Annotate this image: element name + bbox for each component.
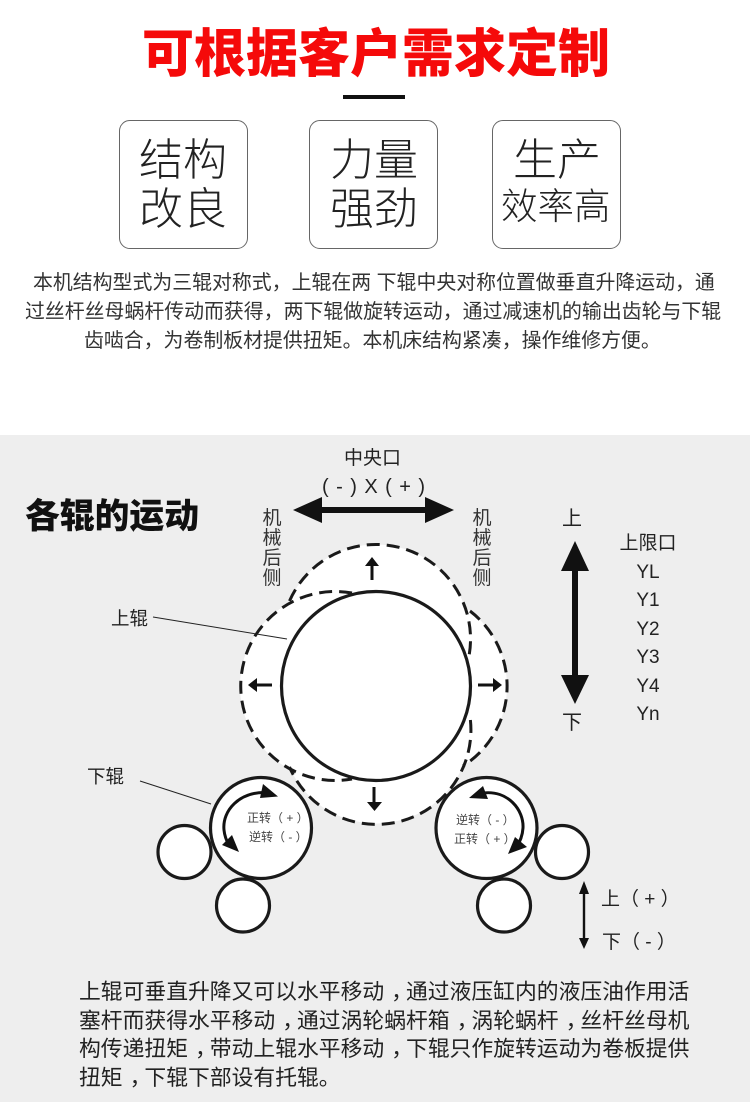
bottom paragraph: 构传递扭矩 ，带动上辊水平移动 ，下辊只作旋转运动为卷板提供 <box>79 1036 689 1061</box>
upper limit list: Y4 <box>636 676 660 697</box>
center opening label: 中央口 <box>344 447 401 469</box>
feature box: strength: 力量 <box>330 136 418 185</box>
upper limit list: Y3 <box>636 647 660 668</box>
intro paragraph: 齿啮合，为卷制板材提供扭矩。本机床结构紧凑，操作维修方便。 <box>84 330 661 352</box>
roller diagram <box>87 447 680 953</box>
upper limit list: Yn <box>636 704 660 725</box>
bottom paragraph <box>79 979 689 1090</box>
rotation labels left: 逆转（ - ） <box>249 829 308 844</box>
small arrow labels: 下（ - ） <box>602 931 676 953</box>
upper limit list: YL <box>636 562 660 583</box>
intro paragraph <box>25 272 721 352</box>
rotation arrow left <box>222 784 278 852</box>
panel heading: 各辊的运动 <box>25 497 199 536</box>
title: 可根据客户需求定制 <box>142 26 610 84</box>
center opening label <box>322 447 425 498</box>
upper roller label: 上辊 <box>111 608 148 629</box>
dashed roller positions <box>241 544 507 824</box>
upper roller <box>282 592 470 780</box>
rear side label right: 后 <box>472 547 492 569</box>
white motion envelope <box>240 544 507 824</box>
lower roller label: 下辊 <box>87 766 124 787</box>
rear side label left: 机 <box>262 507 282 529</box>
leader lines <box>140 617 287 804</box>
upper limit list <box>619 532 677 725</box>
feature box: structure <box>119 120 248 249</box>
rear side label right: 侧 <box>472 567 492 589</box>
feature box: strength <box>309 120 438 249</box>
rear side label left: 侧 <box>262 567 282 589</box>
bottom paragraph: 上辊可垂直升降又可以水平移动 ，通过液压缸内的液压油作用活 <box>79 979 689 1004</box>
feature box: efficiency: 生产 <box>513 136 601 185</box>
center opening label: ( - ) X ( + ) <box>322 476 425 498</box>
bottom paragraph: 扭矩 ，下辊下部设有托辊。 <box>79 1064 341 1090</box>
rear side label right: 机 <box>472 507 492 529</box>
rotation labels right <box>454 812 516 846</box>
feature box: structure: 改良 <box>139 185 227 234</box>
rear side label left <box>262 507 282 589</box>
motion arrows <box>248 557 502 811</box>
rotation labels right: 正转（ + ） <box>454 831 516 846</box>
vertical arrow labels: 下 <box>562 712 582 734</box>
title underline <box>343 95 405 99</box>
feature box: efficiency: 效率高 <box>501 186 610 227</box>
rotation labels left: 正转（ + ） <box>247 810 309 825</box>
vertical arrow labels <box>562 507 582 734</box>
upper limit list: Y1 <box>636 590 660 611</box>
lower roller left group <box>158 778 312 932</box>
feature box: strength: 强劲 <box>330 185 418 234</box>
vertical arrow large <box>561 541 589 704</box>
small arrow labels <box>601 888 680 953</box>
rotation arrow right <box>469 786 527 854</box>
rotation labels left <box>247 810 309 844</box>
intro paragraph: 本机结构型式为三辊对称式，上辊在两 下辊中央对称位置做垂直升降运动，通 <box>33 272 715 294</box>
bottom paragraph: 塞杆而获得水平移动 ，通过涡轮蜗杆箱 ，涡轮蜗杆 ，丝杆丝母机 <box>79 1008 689 1032</box>
rear side label right: 械 <box>472 527 492 549</box>
rear side label left: 械 <box>262 527 282 549</box>
feature box: structure: 结构 <box>139 136 227 185</box>
small arrow labels: 上（ + ） <box>601 888 680 910</box>
rear side label left: 后 <box>262 547 282 569</box>
rear side label right <box>472 507 492 589</box>
panel: roller motion <box>0 435 750 1102</box>
rotation labels right: 逆转（ - ） <box>456 812 515 827</box>
upper limit list: Y2 <box>636 619 660 640</box>
lower roller right group <box>436 778 588 932</box>
small vertical arrow <box>579 881 589 949</box>
feature box: efficiency <box>492 120 621 249</box>
center opening arrow <box>293 497 454 523</box>
intro paragraph: 过丝杆丝母蜗杆传动而获得，两下辊做旋转运动，通过减速机的输出齿轮与下辊 <box>25 301 721 323</box>
upper limit list: 上限口 <box>619 532 677 554</box>
vertical arrow labels: 上 <box>562 507 582 530</box>
